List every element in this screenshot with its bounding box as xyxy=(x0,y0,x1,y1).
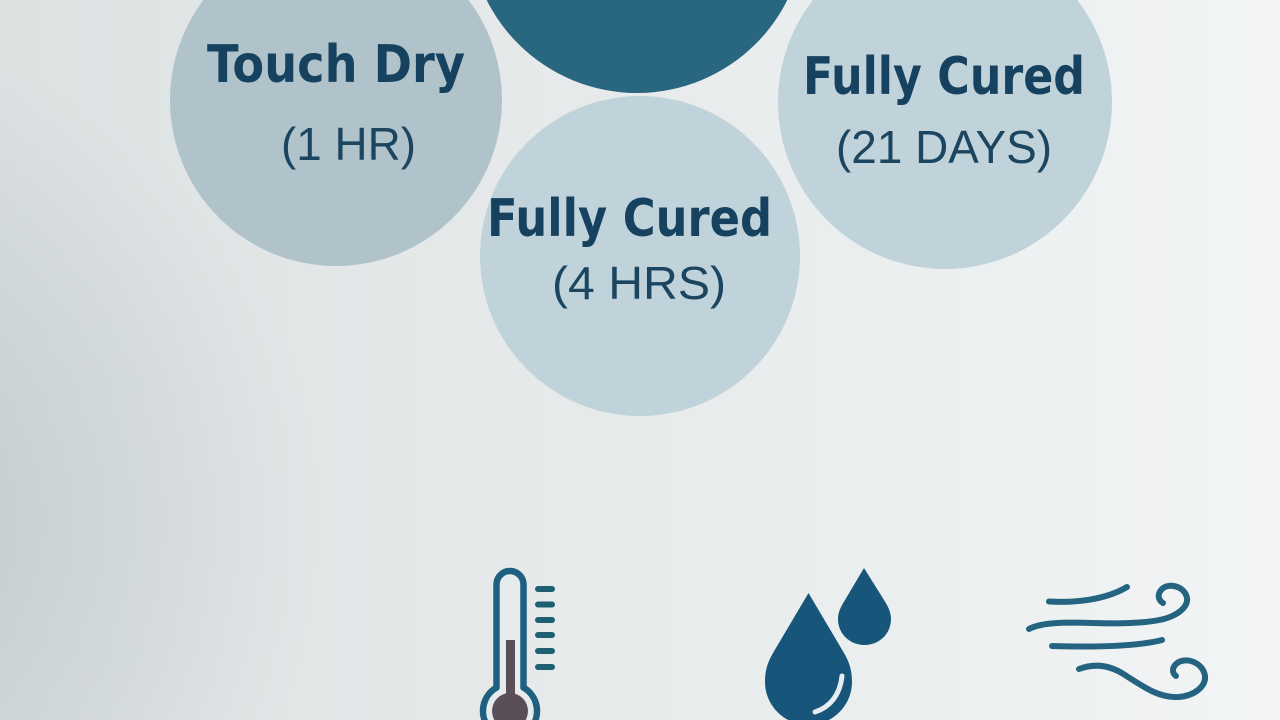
center dark circle xyxy=(469,0,805,93)
icon: water drops xyxy=(765,568,891,720)
duration: 1 hr: (1 HR) xyxy=(281,118,416,170)
heading: fully cured: Fully Cured xyxy=(803,47,1085,107)
stage circle: touch dry xyxy=(170,0,502,266)
heading: touch dry: Touch Dry xyxy=(207,35,465,95)
duration: 21 days: (21 DAYS) xyxy=(836,121,1052,173)
icon: thermometer xyxy=(483,571,552,720)
icon: wind xyxy=(1029,586,1205,697)
stage circle: fully cured 21 days xyxy=(778,0,1112,269)
duration: 4 hrs: (4 HRS) xyxy=(552,257,726,309)
heading: fully cured: Fully Cured xyxy=(487,189,772,249)
stage circle: fully cured 4 hrs xyxy=(480,96,800,416)
